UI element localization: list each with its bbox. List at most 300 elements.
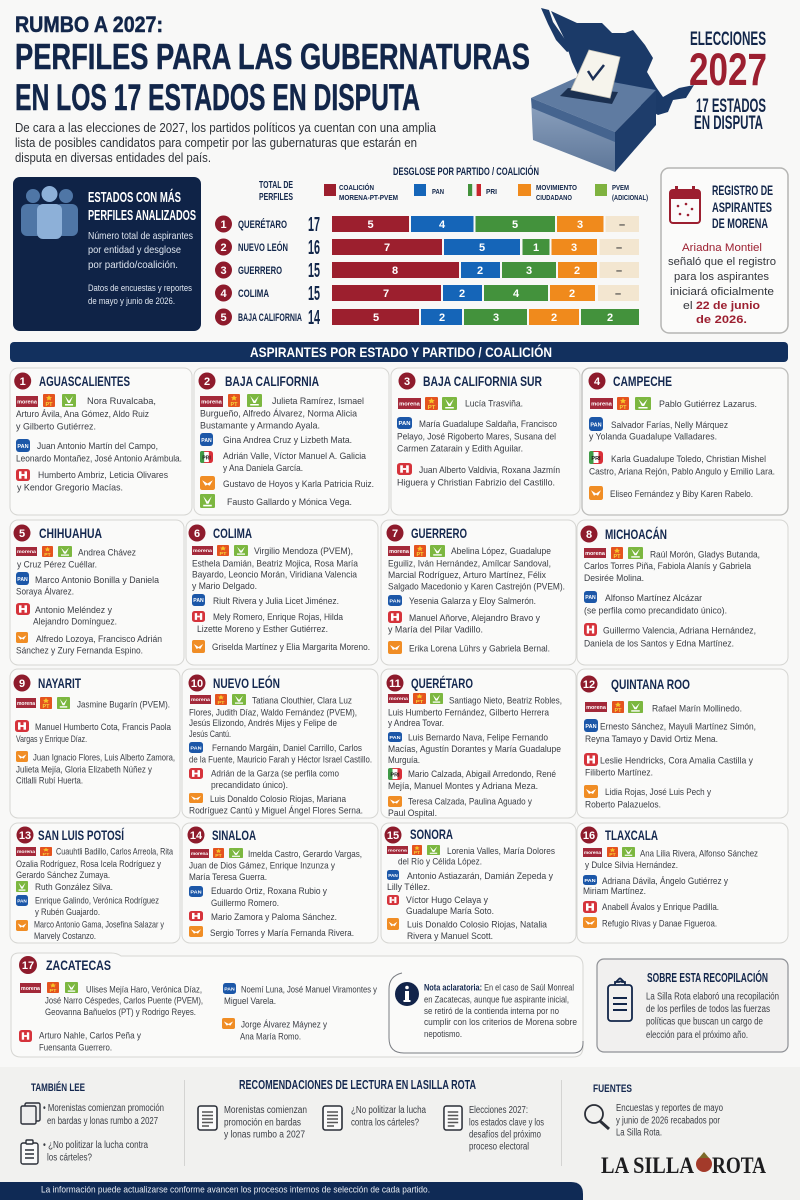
Movimiento Ciudadano aspirants: Alfredo Lozoya, Francisco Adrián bbox=[36, 634, 162, 645]
recommendation 3: desafíos del próximo bbox=[469, 1130, 541, 1140]
title block: EN LOS 17 ESTADOS EN DISPUTA bbox=[15, 77, 420, 118]
card heading: 12 bbox=[583, 679, 595, 691]
Morena-PT-PVEM aspirants: Andrea Chávez bbox=[78, 548, 136, 558]
row: Guerrero: 3 bbox=[526, 265, 532, 277]
recommendation 1: y lonas rumbo a 2027 bbox=[224, 1130, 305, 1140]
PRI aspirants: Filiberto Martínez. bbox=[585, 768, 653, 778]
PAN aspirants: Lilly Téllez. bbox=[387, 882, 430, 893]
PRI aspirants: Higuera y Christian Fabrizio del Castillo. bbox=[397, 478, 555, 488]
PAN aspirants: Reyna Tamayo y David Ortiz Mena. bbox=[585, 734, 718, 745]
title block: PERFILES PARA LAS GUBERNATURAS bbox=[15, 36, 530, 77]
Movimiento Ciudadano aspirants: Rodríguez Cantú y Miguel Ángel Flores Serna. bbox=[189, 806, 363, 816]
banner: aspirantes por estado: ASPIRANTES POR ESTADO Y PARTIDO / COALICIÓN bbox=[250, 343, 552, 360]
panel: estados con más perfiles bbox=[13, 177, 201, 331]
card heading: 14 bbox=[190, 830, 203, 842]
Morena-PT-PVEM aspirants: y Cruz Pérez Cuéllar. bbox=[17, 560, 97, 570]
Morena-PT-PVEM aspirants: Imelda Castro, Gerardo Vargas, bbox=[248, 849, 362, 860]
Morena-PT-PVEM aspirants: y Gilberto Gutiérrez. bbox=[16, 422, 96, 432]
Morena-PT-PVEM aspirants: Eguiliz, Iván Hernández, Amílcar Sandoval, bbox=[388, 558, 551, 570]
card heading: SONORA bbox=[410, 826, 453, 842]
Morena-PT-PVEM aspirants: y Mario Delgado. bbox=[192, 581, 257, 592]
card heading bbox=[580, 826, 658, 844]
PRI aspirants: Mario Zamora y Paloma Sánchez. bbox=[211, 912, 337, 923]
card heading: 2 bbox=[204, 376, 210, 388]
row: Colima: 4 bbox=[220, 288, 227, 300]
card 6: Colima bbox=[186, 520, 378, 665]
Morena-PT-PVEM aspirants bbox=[189, 848, 362, 883]
row: Colima: 15 bbox=[308, 283, 320, 305]
card heading: CAMPECHE bbox=[613, 373, 672, 389]
también lee: los cárteles? bbox=[47, 1152, 92, 1164]
card 5: Chihuahua bbox=[10, 520, 184, 665]
chart legend: MOVIMIENTO bbox=[536, 183, 577, 192]
elecciones 2027 label: 2027 bbox=[689, 44, 767, 95]
panel body: políticas que buscan un cargo de bbox=[646, 1016, 763, 1028]
también lee bbox=[21, 1081, 164, 1164]
panel body bbox=[646, 992, 779, 1041]
card heading bbox=[588, 372, 672, 390]
PVEM aspirants: Fausto Gallardo y Mónica Vega. bbox=[227, 497, 352, 508]
Morena-PT-PVEM aspirants: Luis Humberto Fernández, Gilberto Herrera bbox=[388, 708, 550, 718]
Morena-PT-PVEM aspirants: Julieta Ramírez, Ismael bbox=[272, 396, 364, 407]
icon: magnifier bbox=[585, 1105, 609, 1129]
PAN aspirants: de la Fuente, Mauricio Farah y Héctor Israel Castillo. bbox=[189, 754, 372, 766]
row: Colima: – bbox=[615, 288, 621, 300]
row: Baja California: 2 bbox=[551, 312, 557, 324]
PRI aspirants bbox=[388, 611, 540, 636]
icon: calendar bbox=[670, 186, 700, 223]
row: Nuevo León: NUEVO LEÓN bbox=[238, 241, 288, 254]
Morena-PT-PVEM aspirants: Geovanna Bañuelos (PT) y Rodrigo Reyes. bbox=[45, 1007, 196, 1018]
row: Nuevo León bbox=[215, 237, 639, 259]
PRI aspirants: Vargas y Enrique Díaz. bbox=[16, 734, 87, 745]
Morena-PT-PVEM aspirants bbox=[16, 394, 156, 432]
panel body: de 2026. bbox=[696, 314, 747, 326]
panel heading: DE MORENA bbox=[712, 215, 768, 231]
PAN aspirants: Eduardo Ortiz, Roxana Rubio y bbox=[211, 886, 327, 897]
row: Nuevo León: 3 bbox=[571, 242, 577, 254]
icon: Mexico map and ballot box bbox=[531, 8, 694, 172]
card heading bbox=[386, 524, 467, 542]
Movimiento Ciudadano aspirants: Luis Donaldo Colosio Riojas, Natalia bbox=[407, 920, 548, 930]
Morena-PT-PVEM aspirants: Arturo Ávila, Ana Gómez, Aldo Ruiz bbox=[16, 409, 149, 420]
PAN aspirants bbox=[387, 870, 553, 893]
title block bbox=[15, 12, 530, 118]
PAN aspirants: Riult Rivera y Julia Licet Jiménez. bbox=[213, 596, 339, 607]
recomendaciones de lectura bbox=[198, 1078, 544, 1152]
recommendation 3: los estados clave y los bbox=[469, 1118, 544, 1128]
PAN aspirants: Antonio Astiazarán, Damián Zepeda y bbox=[407, 871, 553, 882]
PRI aspirants bbox=[397, 463, 560, 488]
row: Baja California bbox=[215, 307, 639, 329]
Morena-PT-PVEM aspirants: Burgueño, Alfredo Álvarez, Norma Alicia bbox=[200, 408, 358, 420]
row: Colima: 4 bbox=[513, 288, 520, 300]
card heading: SAN LUIS POTOSÍ bbox=[38, 827, 125, 843]
también lee: en bardas y lonas rumbo a 2027 bbox=[47, 1116, 158, 1127]
card heading bbox=[386, 674, 473, 692]
Movimiento Ciudadano aspirants: Rivera y Manuel Scott. bbox=[407, 931, 493, 942]
fuentes: La Silla Rota. bbox=[616, 1128, 662, 1138]
PAN aspirants: y Yolanda Guadalupe Valladares. bbox=[589, 432, 717, 442]
PVEM aspirants bbox=[16, 881, 113, 893]
card heading bbox=[384, 826, 453, 844]
card heading bbox=[580, 676, 690, 692]
PVEM aspirants bbox=[200, 494, 352, 508]
chart legend: CIUDADANO bbox=[536, 193, 572, 202]
card 1: Aguascalientes bbox=[10, 368, 192, 515]
PRI aspirants: Guadalupe María Soto. bbox=[406, 906, 494, 917]
PAN aspirants: Macías, Agustín Dorantes y María Guadalupe bbox=[388, 744, 561, 755]
PRI aspirants: Mejía, Manuel Montes y Adriana Meza. bbox=[388, 781, 538, 792]
chart legend: COALICIÓN bbox=[339, 183, 374, 192]
panel heading bbox=[88, 189, 196, 224]
panel body bbox=[668, 242, 776, 326]
card 9: Nayarit bbox=[10, 669, 180, 818]
Morena-PT-PVEM aspirants: Carlos Torres Piña, Fabiola Alanís y Gabriela bbox=[584, 561, 752, 572]
card 13: San Luis Potosí bbox=[10, 823, 180, 943]
Morena-PT-PVEM aspirants: María Teresa Guerra. bbox=[189, 872, 267, 883]
card heading bbox=[188, 826, 256, 844]
card heading bbox=[188, 524, 252, 542]
Movimiento Ciudadano aspirants: Ana María Romo. bbox=[240, 1032, 301, 1042]
Morena-PT-PVEM aspirants bbox=[16, 697, 170, 710]
PRI aspirants: y Kendor Gregorio Macías. bbox=[17, 482, 123, 494]
Morena-PT-PVEM aspirants: Bustamante y Armando Ayala. bbox=[200, 420, 320, 432]
row: Guerrero: 2 bbox=[574, 265, 580, 277]
Morena-PT-PVEM aspirants: Virgilio Mendoza (PVEM), bbox=[254, 546, 353, 557]
note text: cumplir con los criterios de Morena sobre bbox=[424, 1017, 577, 1028]
Morena-PT-PVEM aspirants bbox=[200, 394, 364, 432]
Morena-PT-PVEM aspirants: Lorenia Valles, María Dolores bbox=[447, 846, 555, 857]
PRI aspirants: Arturo Nahle, Carlos Peña y bbox=[39, 1030, 141, 1042]
PAN aspirants: Murguía. bbox=[388, 755, 420, 766]
recommendation 2 bbox=[323, 1105, 426, 1130]
panel body: para los aspirantes bbox=[674, 271, 769, 283]
PRI aspirants: Adrián de la Garza (se perfila como bbox=[211, 768, 339, 780]
card heading: BAJA CALIFORNIA bbox=[225, 373, 319, 389]
PAN aspirants bbox=[223, 983, 377, 1007]
Movimiento Ciudadano aspirants: Griselda Martínez y Elia Margarita Moreno. bbox=[212, 642, 370, 653]
card 11: Querétaro bbox=[381, 669, 576, 819]
panel body: Ariadna Montiel bbox=[682, 242, 762, 254]
panel heading: ASPIRANTES bbox=[712, 199, 772, 215]
row: Guerrero: 8 bbox=[392, 265, 398, 277]
PRI aspirants: y Ana Daniela García. bbox=[223, 463, 303, 474]
card heading: 17 bbox=[22, 960, 34, 972]
Movimiento Ciudadano aspirants: Teresa Calzada, Paulina Aguado y bbox=[408, 796, 532, 808]
Morena-PT-PVEM aspirants: Nora Ruvalcaba, bbox=[87, 396, 156, 407]
card heading: 6 bbox=[194, 528, 200, 540]
PRI aspirants: Lizette Moreno y Esther Gutiérrez. bbox=[197, 624, 328, 635]
panel heading bbox=[712, 182, 773, 231]
Movimiento Ciudadano aspirants bbox=[388, 641, 550, 654]
PAN aspirants: Luis Bernardo Nava, Felipe Fernando bbox=[408, 732, 548, 744]
chart legend: PVEM bbox=[612, 183, 629, 192]
PRI aspirants: y María del Pilar Vadillo. bbox=[388, 624, 483, 636]
PVEM aspirants: Ruth González Silva. bbox=[35, 882, 113, 893]
PAN aspirants bbox=[388, 732, 561, 766]
PAN aspirants bbox=[16, 895, 159, 918]
PAN aspirants: Alfonso Martínez Alcázar bbox=[605, 593, 702, 604]
row: Nuevo León: – bbox=[616, 242, 622, 254]
Movimiento Ciudadano aspirants: Eliseo Fernández y Biby Karen Rabelo. bbox=[610, 489, 753, 500]
recommendation 1: promoción en bardas bbox=[224, 1118, 301, 1128]
PRI aspirants: Castro, Ariana Rejón, Pablo Angulo y Emilio Lara. bbox=[589, 466, 775, 478]
PRI aspirants: Anabell Ávalos y Enrique Padilla. bbox=[602, 902, 719, 913]
card 7: Guerrero bbox=[381, 520, 576, 665]
card heading bbox=[16, 826, 125, 844]
Morena-PT-PVEM aspirants bbox=[583, 847, 758, 871]
PRI aspirants: Alejandro Domínguez. bbox=[33, 616, 117, 628]
card heading: SINALOA bbox=[212, 827, 256, 843]
Morena-PT-PVEM aspirants: Jesús Elizondo, Andrés Mijes y Felipe de bbox=[189, 718, 337, 729]
chart legend: PAN bbox=[432, 187, 444, 196]
icon: group of people bbox=[21, 186, 78, 239]
logo: La Silla Rota: LA SILLA bbox=[601, 1153, 694, 1178]
PRI aspirants bbox=[387, 895, 494, 917]
panel body: el 22 de junio bbox=[683, 300, 760, 312]
Morena-PT-PVEM aspirants: del Río y Célida López. bbox=[398, 856, 482, 868]
logo: La Silla Rota bbox=[601, 1152, 766, 1178]
Movimiento Ciudadano aspirants: Gustavo de Hoyos y Karla Patricia Ruiz. bbox=[223, 479, 374, 490]
intro paragraph: lista de posibles candidatos para competir por las gubernaturas que estarán en bbox=[15, 136, 417, 150]
también lee: • Morenistas comienzan promoción bbox=[43, 1103, 164, 1114]
Morena-PT aspirants bbox=[16, 846, 174, 881]
card heading bbox=[398, 372, 542, 390]
callout: nota aclaratoria bbox=[389, 973, 583, 1053]
PAN aspirants: Guillermo Romero. bbox=[211, 898, 279, 909]
note text: Nota aclaratoria: En el caso de Saúl Monreal bbox=[424, 982, 574, 994]
Movimiento Ciudadano aspirants: Citlalli Rubí Huerta. bbox=[16, 776, 83, 786]
Morena-PT aspirants: Ozalia Rodríguez, Rosa Icela Rodríguez y bbox=[16, 859, 161, 870]
card heading: NUEVO LEÓN bbox=[213, 674, 280, 691]
PAN aspirants: Leonardo Montañez, José Antonio Arámbula. bbox=[16, 454, 182, 464]
Morena-PT-PVEM aspirants: Salgado Macedonio y Karen Castrejón (PVEM). bbox=[388, 582, 565, 592]
bottom note bar: La información puede actualizarse conforme avancen los procesos internos de selección de cada partido. bbox=[41, 1184, 430, 1196]
Movimiento Ciudadano aspirants: Luis Donaldo Colosio Riojas, Mariana bbox=[210, 794, 347, 805]
PAN aspirants bbox=[189, 886, 327, 909]
Morena-PT-PVEM aspirants bbox=[398, 397, 523, 411]
PRI aspirants: Karla Guadalupe Toledo, Christian Mishel bbox=[611, 454, 766, 465]
PRI aspirants bbox=[200, 451, 367, 474]
row: Querétaro bbox=[215, 214, 639, 236]
PRI aspirants: precandidato único). bbox=[211, 780, 288, 791]
panel description: por entidad y desglose bbox=[88, 244, 181, 256]
también lee: • ¿No politizar la lucha contra bbox=[43, 1140, 148, 1151]
row: Colima: COLIMA bbox=[238, 288, 269, 300]
Movimiento Ciudadano aspirants: Roberto Palazuelos. bbox=[585, 800, 661, 810]
Morena-PT-PVEM aspirants: Jasmine Bugarín (PVEM). bbox=[77, 700, 170, 710]
panel description: Datos de encuestas y reportes bbox=[88, 283, 192, 293]
card 8: Michoacán bbox=[577, 520, 788, 665]
panel description: Número total de aspirantes bbox=[88, 230, 193, 242]
PAN aspirants: Noemí Luna, José Manuel Viramontes y bbox=[241, 984, 377, 996]
PRI aspirants: Antonio Meléndez y bbox=[35, 605, 112, 616]
PAN aspirants: Pelayo, José Rigoberto Mares, Susana del bbox=[397, 432, 556, 442]
note text: se retiró de la contienda interna por no bbox=[424, 1006, 559, 1017]
row: Baja California: 2 bbox=[439, 312, 445, 324]
Morena-PT-PVEM aspirants: Tatiana Clouthier, Clara Luz bbox=[252, 696, 352, 706]
Morena-PT-PVEM aspirants bbox=[192, 545, 359, 592]
recommendation 3: Elecciones 2027: bbox=[469, 1105, 528, 1116]
row: Guerrero: – bbox=[616, 265, 622, 277]
card heading bbox=[580, 526, 667, 542]
Morena-PT-PVEM aspirants: Ulises Mejía Haro, Verónica Díaz, bbox=[86, 984, 202, 996]
PRI aspirants: Manuel Añorve, Alejandro Bravo y bbox=[409, 613, 540, 624]
note text: nepotismo. bbox=[424, 1029, 462, 1040]
card heading: 13 bbox=[19, 830, 31, 842]
Morena-PT-PVEM aspirants: Desirée Molina. bbox=[584, 573, 644, 584]
card heading: 5 bbox=[19, 528, 25, 540]
intro paragraph: De cara a las elecciones de 2027, los partidos políticos ya cuentan con una amplia bbox=[15, 121, 436, 135]
row: Baja California: 5 bbox=[220, 312, 227, 324]
Movimiento Ciudadano aspirants bbox=[200, 476, 374, 490]
card heading bbox=[14, 674, 81, 692]
row: Querétaro: 5 bbox=[512, 219, 518, 231]
Movimiento Ciudadano aspirants bbox=[189, 793, 363, 816]
card heading bbox=[188, 674, 280, 692]
card heading: QUERÉTARO bbox=[411, 675, 473, 691]
card heading bbox=[198, 372, 319, 390]
row: Colima: 2 bbox=[459, 288, 465, 300]
row: Querétaro: 5 bbox=[367, 219, 374, 231]
panel description: por partido/coalición. bbox=[88, 259, 178, 271]
Morena-PT-PVEM aspirants: Bayardo, Leoncio Morán, Viridiana Valencia bbox=[192, 570, 358, 580]
Movimiento Ciudadano aspirants bbox=[16, 632, 162, 656]
total de perfiles label bbox=[259, 180, 293, 203]
card heading: AGUASCALIENTES bbox=[39, 373, 130, 389]
note text: en Zacatecas, aunque fue aspirante inicial, bbox=[424, 994, 569, 1006]
PRI aspirants: Juan Alberto Valdivia, Roxana Jazmín bbox=[419, 465, 560, 476]
panel description: de mayo y junio de 2026. bbox=[88, 296, 175, 306]
card 10: Nuevo León bbox=[182, 669, 378, 818]
row: Querétaro: 4 bbox=[439, 219, 446, 231]
card heading: 4 bbox=[594, 376, 601, 388]
row: Colima: 2 bbox=[569, 288, 575, 300]
panel body: de los perfiles de todos las fuerzas bbox=[646, 1004, 770, 1015]
PAN aspirants bbox=[589, 417, 728, 442]
total de perfiles label: TOTAL DE bbox=[259, 180, 293, 191]
row: Colima bbox=[215, 283, 639, 305]
bar chart: top 5 states bbox=[215, 214, 639, 329]
PRI aspirants: Víctor Hugo Celaya y bbox=[406, 895, 488, 906]
Movimiento Ciudadano aspirants: Sánchez y Zury Fernanda Espino. bbox=[16, 646, 143, 656]
PAN aspirants: Miguel Varela. bbox=[224, 996, 276, 1007]
PRI aspirants bbox=[189, 768, 339, 791]
card heading: 11 bbox=[389, 678, 401, 690]
PAN aspirants bbox=[397, 417, 557, 454]
row: Baja California: 3 bbox=[493, 312, 499, 324]
recommendation 3: proceso electoral bbox=[469, 1142, 529, 1152]
card 16: Tlaxcala bbox=[577, 823, 788, 943]
bottom note bar bbox=[0, 1182, 583, 1200]
panel heading: PERFILES ANALIZADOS bbox=[88, 207, 196, 224]
card heading: 7 bbox=[392, 528, 398, 540]
icon: documents bbox=[21, 1103, 40, 1124]
panel heading: ESTADOS CON MÁS bbox=[88, 189, 181, 206]
Movimiento Ciudadano aspirants: Marvely Costanzo. bbox=[34, 931, 96, 942]
chart legend: PRI bbox=[486, 187, 497, 196]
también lee: TAMBIÉN LEE bbox=[31, 1081, 85, 1094]
card 4: Campeche bbox=[582, 368, 788, 515]
PAN aspirants bbox=[584, 591, 727, 616]
icon: clipboard bbox=[21, 1140, 38, 1164]
card 12: Quintana Roo bbox=[577, 669, 788, 818]
row: Baja California: 2 bbox=[607, 312, 613, 324]
Movimiento Ciudadano aspirants: Julieta Mejía, Gloria Elizabeth Núñez y bbox=[16, 764, 152, 776]
PRI aspirants: Manuel Humberto Cota, Francis Paola bbox=[35, 722, 172, 733]
PRI aspirants bbox=[584, 753, 753, 778]
icon: clipboard bbox=[608, 978, 632, 1021]
Morena-PT-PVEM aspirants bbox=[388, 693, 562, 729]
row: Baja California: 5 bbox=[373, 312, 379, 324]
fuentes: y junio de 2026 recabados por bbox=[616, 1116, 721, 1126]
PAN aspirants: Salvador Farías, Nelly Márquez bbox=[611, 420, 728, 431]
PRI aspirants bbox=[16, 469, 168, 494]
chart heading: DESGLOSE POR PARTIDO / COALICIÓN bbox=[393, 165, 539, 178]
PAN aspirants bbox=[583, 875, 728, 897]
PAN aspirants: María Guadalupe Saldaña, Francisco bbox=[419, 419, 557, 430]
card heading: 10 bbox=[191, 678, 203, 690]
row: Baja California: BAJA CALIFORNIA bbox=[238, 312, 302, 324]
panel: sobre esta recopilación bbox=[597, 959, 788, 1052]
state cards grid bbox=[10, 368, 788, 1057]
Movimiento Ciudadano aspirants bbox=[222, 1018, 327, 1042]
row: Nuevo León: 5 bbox=[479, 242, 485, 254]
PAN aspirants: (se perfila como precandidato único). bbox=[584, 606, 727, 616]
row: Colima: 7 bbox=[383, 288, 389, 300]
panel: registro de aspirantes bbox=[661, 168, 788, 333]
Morena-PT-PVEM aspirants bbox=[16, 546, 136, 570]
chart legend bbox=[324, 183, 648, 202]
icon: info bbox=[395, 982, 419, 1006]
card heading: GUERRERO bbox=[411, 525, 467, 541]
Movimiento Ciudadano aspirants bbox=[583, 917, 717, 930]
row: Guerrero bbox=[215, 260, 639, 282]
card 14: Sinaloa bbox=[182, 823, 378, 943]
Morena-PT-PVEM aspirants: Raúl Morón, Gladys Butanda, bbox=[650, 550, 760, 560]
Movimiento Ciudadano aspirants bbox=[584, 785, 711, 810]
PRI aspirants bbox=[16, 603, 117, 628]
card heading: 1 bbox=[20, 376, 26, 388]
row: Baja California: 14 bbox=[308, 307, 320, 329]
Morena-PT-PVEM aspirants: Ana Lilia Rivera, Alfonso Sánchez bbox=[640, 848, 758, 860]
Movimiento Ciudadano aspirants: Juan Ignacio Flores, Luis Alberto Zamora, bbox=[33, 752, 175, 764]
card heading: TLAXCALA bbox=[605, 827, 658, 843]
PAN aspirants bbox=[16, 572, 160, 598]
footer bbox=[0, 1067, 800, 1200]
Movimiento Ciudadano aspirants: Erika Lorena Lührs y Gabriela Bernal. bbox=[409, 644, 550, 654]
fuentes bbox=[585, 1083, 723, 1138]
PRI aspirants bbox=[19, 1030, 141, 1054]
PRI aspirants: Mario Calzada, Abigail Arredondo, René bbox=[408, 769, 556, 780]
chart legend: MORENA-PT-PVEM bbox=[339, 193, 398, 202]
recomendaciones de lectura: RECOMENDACIONES DE LECTURA EN LASILLA ROTA bbox=[239, 1078, 476, 1092]
fuentes: FUENTES bbox=[593, 1083, 632, 1095]
Morena-PT-PVEM aspirants: Rafael Marín Mollinedo. bbox=[652, 704, 742, 714]
card heading: 8 bbox=[586, 529, 592, 541]
Movimiento Ciudadano aspirants bbox=[388, 796, 532, 819]
intro paragraph bbox=[15, 121, 436, 165]
row: Guerrero: 15 bbox=[308, 260, 320, 282]
recommendation 2: ¿No politizar la lucha bbox=[351, 1105, 426, 1116]
PAN aspirants: Fernando Margáin, Daniel Carrillo, Carlos bbox=[212, 743, 362, 754]
PRI aspirants bbox=[15, 720, 172, 745]
Movimiento Ciudadano aspirants: Jorge Álvarez Máynez y bbox=[241, 1020, 327, 1030]
Movimiento Ciudadano aspirants bbox=[387, 918, 548, 942]
Movimiento Ciudadano aspirants bbox=[192, 640, 370, 653]
recommendation 3 bbox=[444, 1105, 544, 1152]
